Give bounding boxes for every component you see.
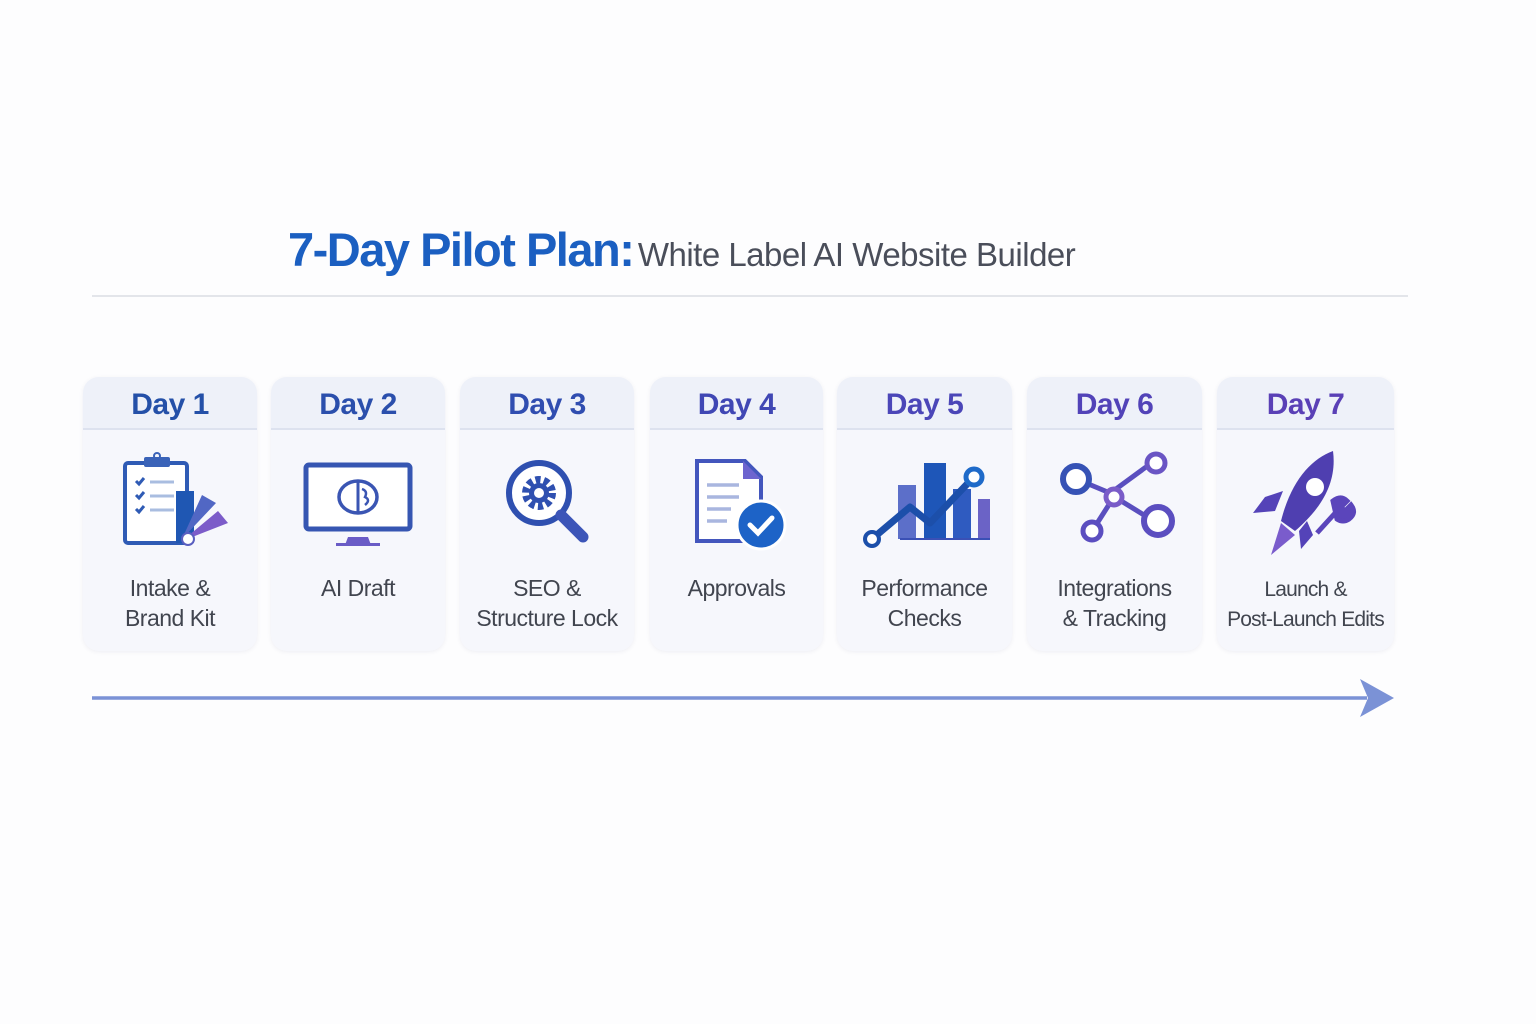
card: day 1: Day 1 <box>131 388 209 421</box>
card: day 5: Day 5 <box>886 388 963 421</box>
card: day 2: Day 2 <box>319 388 397 421</box>
card: day 7 <box>1217 377 1394 651</box>
card: day 3: Structure Lock <box>476 605 618 631</box>
card: day 3: Day 3 <box>508 388 586 421</box>
card: day 4 <box>650 377 823 651</box>
card: day 3 <box>460 377 634 651</box>
card: day 7: Day 7 <box>1267 388 1344 421</box>
card: day 2 <box>271 377 445 651</box>
card: day 2: AI Draft <box>321 575 395 601</box>
icon: chart <box>863 463 990 548</box>
card: day 1 <box>83 377 257 651</box>
card: day 1: Intake & <box>130 575 210 601</box>
card: day 5: Checks <box>888 605 961 631</box>
icon: magnifier with gear <box>506 460 588 542</box>
icon: clipboard and swatches <box>123 452 228 546</box>
card: day 6 <box>1027 377 1202 651</box>
card: day 6: & Tracking <box>1063 605 1166 631</box>
card: day 3: SEO & <box>513 575 581 601</box>
icon: monitor with brain <box>304 462 412 546</box>
card: day 7: Post-Launch Edits <box>1227 608 1384 631</box>
icon: document with check <box>695 459 786 550</box>
card: day 6: Integrations <box>1057 575 1172 601</box>
icon: rocket with wrench <box>1253 451 1356 555</box>
card: day 6: Day 6 <box>1076 388 1153 421</box>
card: day 7: Launch & <box>1264 578 1347 601</box>
title: 7-Day Pilot Plan: White Label AI Website Builder <box>288 223 1075 276</box>
icon: network nodes <box>1060 452 1175 542</box>
card: day 1: Brand Kit <box>125 605 215 631</box>
arrow: timeline <box>92 679 1394 717</box>
card: day 4: Approvals <box>688 575 785 601</box>
card: day 4: Day 4 <box>698 388 775 421</box>
card: day 5 <box>837 377 1012 651</box>
card: day 5: Performance <box>861 575 988 601</box>
